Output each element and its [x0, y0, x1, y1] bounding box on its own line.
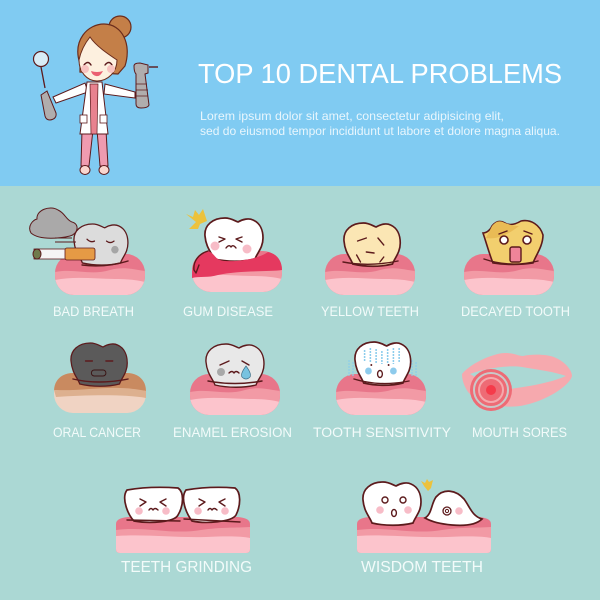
icon: sore target: [470, 369, 512, 411]
dentist character: [34, 16, 158, 174]
panel: yellow teeth: [321, 223, 419, 319]
tooth: [483, 221, 543, 264]
scrubs top: [90, 84, 98, 134]
label: DECAYED TOOTH: [461, 303, 570, 319]
hair bun: [109, 16, 131, 38]
tooth: [205, 218, 263, 261]
icon: grey tooth: [74, 224, 128, 265]
gum: [54, 373, 146, 413]
tooth: [206, 344, 264, 387]
tooth: [344, 223, 400, 266]
panel: decayed tooth: [461, 221, 570, 319]
icon: tear: [242, 366, 250, 379]
icon: smoke cloud: [30, 208, 77, 238]
drill tool: [134, 63, 158, 108]
icon: pain spark: [186, 209, 207, 229]
intro text: Lorem ipsum dolor sit amet, consectetur adipisicing elit,: [200, 109, 504, 123]
label: ORAL CANCER: [53, 424, 141, 440]
front tooth: [363, 482, 421, 525]
label: YELLOW TEETH: [321, 303, 419, 319]
panel: teeth grinding: [116, 487, 252, 576]
hair: [78, 24, 127, 74]
intro text: sed do eiusmod tempor incididunt ut labore et dolore magna aliqua.: [200, 124, 560, 138]
label: TEETH GRINDING: [121, 559, 252, 576]
label: TOOTH SENSITIVITY: [313, 424, 452, 440]
body background: [0, 186, 600, 600]
label: WISDOM TEETH: [361, 559, 483, 576]
tooth: [355, 342, 411, 385]
tooth: [71, 343, 127, 386]
trousers: [81, 130, 108, 166]
header background: [0, 0, 600, 186]
face: [79, 37, 117, 81]
label: ENAMEL EROSION: [173, 424, 292, 440]
smoke trails: [55, 238, 76, 242]
label: MOUTH SORES: [472, 424, 567, 440]
panel: gum disease: [183, 209, 282, 319]
icon: lips: [462, 353, 572, 407]
gum: [192, 251, 282, 292]
label: BAD BREATH: [53, 303, 134, 319]
panel: tooth sensitivity: [313, 342, 452, 440]
lab coat: [80, 82, 108, 134]
panel: mouth sores: [462, 353, 572, 440]
intro text: [200, 109, 560, 138]
title: TOP 10 DENTAL PROBLEMS: [198, 58, 562, 89]
mirror tool: [34, 52, 56, 120]
icon: cigarette: [33, 248, 95, 260]
right tooth: [184, 487, 240, 522]
panel: wisdom teeth: [357, 479, 491, 576]
arms: [53, 83, 88, 103]
inflamed gum: [192, 251, 282, 278]
wisdom tooth: [425, 491, 482, 525]
panel: oral cancer: [53, 343, 146, 440]
sensitivity waves: [349, 360, 416, 376]
panel: bad breath: [30, 208, 145, 319]
icon: pain spark: [421, 479, 433, 491]
panel: enamel erosion: [173, 344, 292, 440]
face details: [81, 62, 115, 76]
shoes: [80, 166, 90, 174]
left tooth: [125, 487, 182, 522]
label: GUM DISEASE: [183, 303, 273, 319]
pockets: [80, 115, 87, 123]
